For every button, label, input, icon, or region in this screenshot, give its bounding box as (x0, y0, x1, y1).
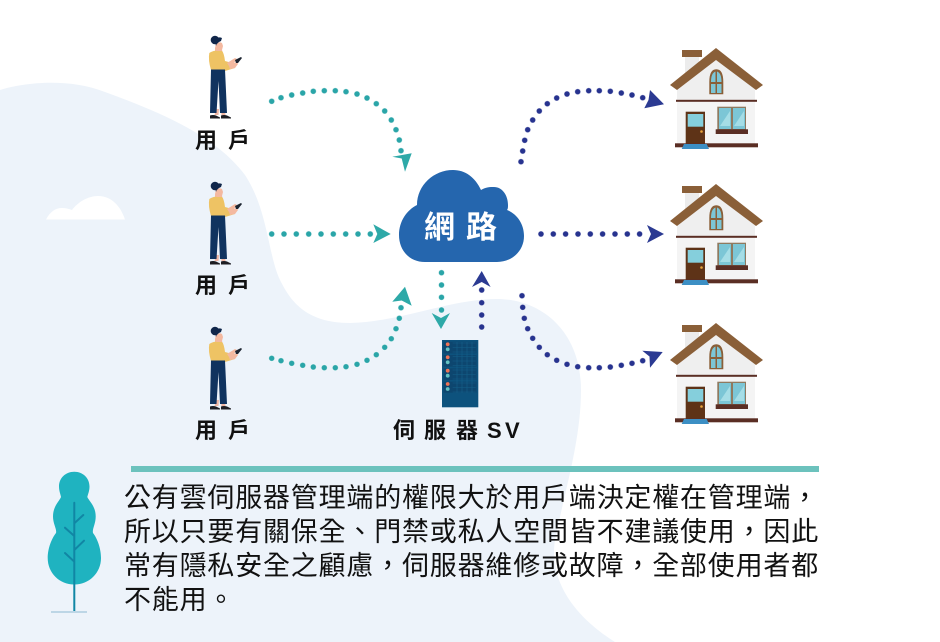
text block: description: 不能用。 (124, 585, 235, 615)
arrow: cloud to house 1 (518, 88, 664, 165)
divider bar (131, 466, 819, 472)
icon: house 2 (670, 184, 763, 285)
arrow: user 3 to cloud (269, 287, 412, 371)
icon: person (209, 182, 242, 264)
user 1 (195, 36, 250, 153)
icon: house 3 (670, 323, 763, 424)
label: user: 用戶 (195, 273, 250, 298)
arrow: user 1 to cloud (269, 88, 412, 172)
label: user: 用戶 (195, 128, 250, 153)
icon: tree (48, 472, 101, 613)
text block: description (124, 483, 819, 615)
label: server: 伺服器SV (393, 418, 520, 443)
icon: person (209, 327, 242, 410)
icon: server rack (442, 340, 478, 407)
icon: person (209, 36, 242, 119)
icon: cloud network (399, 170, 524, 262)
text block: description: 常有隱私安全之顧慮，伺服器維修或故障，全部使用者都 (124, 551, 819, 581)
background blob (0, 83, 615, 642)
text block: description: 所以只要有關保全、門禁或私人空間皆不建議使用，因此 (124, 517, 819, 547)
arrow: cloud to server (432, 270, 450, 329)
arrow: cloud to house 2 (538, 225, 664, 243)
arrow: server to cloud (472, 271, 491, 330)
user 2 (195, 182, 250, 298)
label: user: 用戶 (195, 418, 250, 443)
user 3 (195, 327, 250, 443)
text block: description: 公有雲伺服器管理端的權限大於用戶端決定權在管理端， (124, 483, 819, 513)
arrow: cloud to house 3 (519, 293, 663, 371)
icon: house 1 (670, 48, 763, 149)
arrow: user 2 to cloud (269, 224, 391, 243)
icon: small cloud (46, 196, 125, 220)
label: network: 網路 (424, 210, 497, 245)
